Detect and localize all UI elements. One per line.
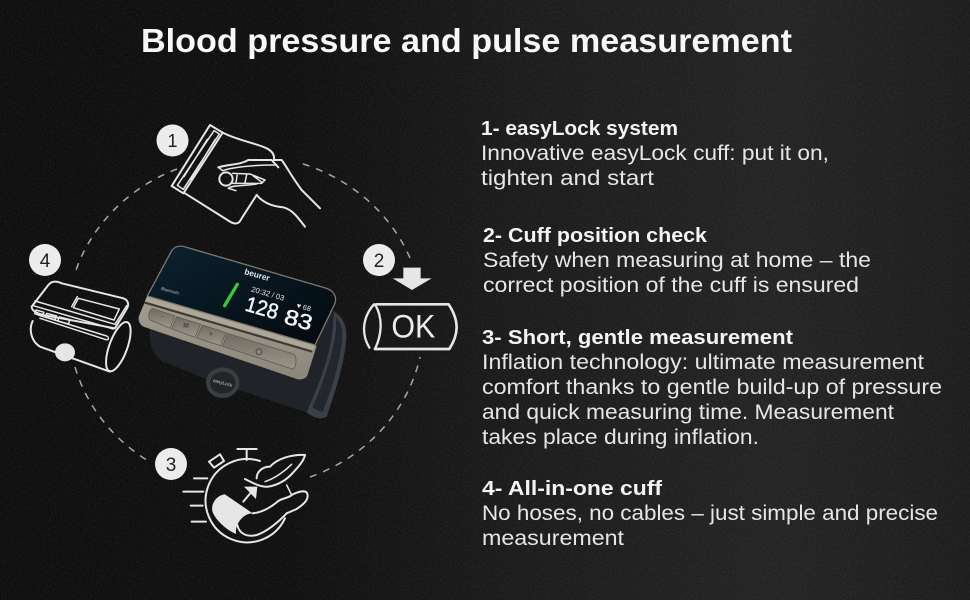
buttons: + xyxy=(209,331,213,338)
front metal band xyxy=(139,296,317,379)
text block 2: cuff position check xyxy=(483,224,871,297)
text block 1: easyLock system xyxy=(481,117,829,190)
text block 2: cuff position check: Safety when measuring at home – the xyxy=(483,249,871,272)
step number badge 2: 2 xyxy=(374,251,384,272)
bluetooth label: Bluetooth xyxy=(161,286,180,296)
display readings: ♥ 68 xyxy=(296,301,312,313)
display readings: 20:32 / 03 xyxy=(250,285,285,303)
blood pressure monitor device xyxy=(139,246,347,418)
buttons xyxy=(149,308,296,369)
icon: step 2 arrow and OK cuff: OK xyxy=(391,308,436,345)
text block 1: easyLock system: Innovative easyLock cuff: put it on, xyxy=(481,142,829,165)
icon: step 4 device with cuff xyxy=(31,282,136,374)
step number badge 4 xyxy=(29,244,61,276)
text block 4: all-in-one cuff: 4- All-in-one cuff xyxy=(482,477,662,500)
text block 3: short, gentle measurement: comfort thanks to gentle build-up of pressure xyxy=(482,376,942,399)
text block 2: cuff position check: 2- Cuff position check xyxy=(483,224,708,247)
step number badge 4: 4 xyxy=(40,251,51,272)
text block 3: short, gentle measurement xyxy=(482,326,942,449)
step number badge 3 xyxy=(155,448,187,480)
title: Blood pressure and pulse measurement xyxy=(141,22,792,59)
cuff inner band xyxy=(307,312,346,418)
text block 3: short, gentle measurement: takes place during inflation. xyxy=(482,426,759,449)
cuff xyxy=(149,310,347,417)
green indicator bar xyxy=(225,284,237,306)
buttons: M xyxy=(183,323,189,330)
buttons: – xyxy=(160,313,164,320)
text block 1: easyLock system: 1- easyLock system xyxy=(481,117,678,140)
display readings: 128 xyxy=(243,292,281,324)
display readings xyxy=(242,284,318,335)
text block 1: easyLock system: tighten and start xyxy=(481,167,654,190)
text block 4: all-in-one cuff xyxy=(482,477,938,550)
cuff dial: easyLock xyxy=(212,378,233,388)
text block 3: short, gentle measurement: Inflation technology: ultimate measurement xyxy=(482,351,924,374)
text block 3: short, gentle measurement: 3- Short, gentle measurement xyxy=(482,326,793,349)
step number badge 1: 1 xyxy=(167,131,178,151)
text block 4: all-in-one cuff: No hoses, no cables – just simple and precise xyxy=(482,502,938,525)
text block 4: all-in-one cuff: measurement xyxy=(482,527,624,550)
step number badge 1 xyxy=(156,124,188,156)
display readings: 83 xyxy=(282,305,315,335)
icon: step 2 arrow and OK cuff xyxy=(364,268,457,349)
icon: step 1 hand tightening cuff xyxy=(172,125,320,227)
text block 2: cuff position check: correct position of the cuff is ensured xyxy=(483,274,859,297)
step number badge 2 xyxy=(363,244,395,276)
cuff dial xyxy=(206,367,239,398)
step number badge 3: 3 xyxy=(166,455,176,476)
brand logo: beurer xyxy=(243,266,272,283)
dashed circle connecting the steps xyxy=(75,163,420,477)
black display panel xyxy=(147,246,336,345)
text block 3: short, gentle measurement: and quick measuring time. Measurement xyxy=(482,401,894,424)
icon: step 3 stopwatch and arm xyxy=(183,449,308,542)
